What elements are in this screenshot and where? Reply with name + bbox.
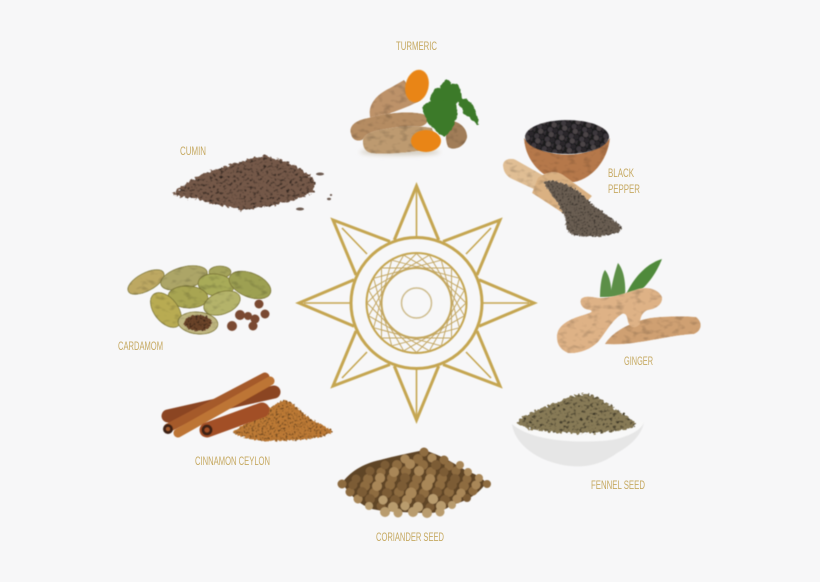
label: fennel seed: FENNEL SEED xyxy=(591,478,645,492)
icon: ground pepper xyxy=(543,181,622,237)
icon: white bowl xyxy=(512,420,644,466)
label: black pepper: BLACK xyxy=(608,166,634,180)
icon: peppercorns xyxy=(525,120,609,154)
icon: scoop xyxy=(503,159,592,219)
spice: turmeric xyxy=(350,39,479,155)
label: coriander seed: CORIANDER SEED xyxy=(376,530,444,544)
spice: cumin xyxy=(173,144,332,210)
label: turmeric: TURMERIC xyxy=(396,39,437,53)
label: ginger: GINGER xyxy=(624,354,653,368)
icon: opened pod seeds xyxy=(184,315,212,331)
icon: cinnamon powder xyxy=(232,400,333,441)
centre circle xyxy=(402,288,432,318)
spice: black pepper xyxy=(503,120,640,237)
icon: loose seeds xyxy=(227,300,270,331)
label: cumin: CUMIN xyxy=(180,144,206,158)
spice: cardamom xyxy=(118,261,275,353)
icon: wooden bowl xyxy=(524,138,610,183)
icon: turmeric roots xyxy=(350,67,467,155)
icon: cumin pile xyxy=(173,155,315,210)
icon: ginger root xyxy=(557,288,701,353)
label: black pepper: PEPPER xyxy=(608,182,640,196)
label: cardamom: CARDAMOM xyxy=(118,339,163,353)
spice: ginger xyxy=(557,259,701,368)
woven ring xyxy=(366,253,466,353)
outer ring xyxy=(351,238,482,368)
icon: ginger leaves xyxy=(600,259,662,297)
star spikes xyxy=(299,186,534,420)
icon: fennel seeds xyxy=(516,394,636,433)
icon: coriander pile xyxy=(338,448,490,518)
spice: fennel seed xyxy=(512,394,645,492)
icon: stray cumin seeds xyxy=(296,172,332,210)
spice: coriander seed xyxy=(338,448,490,544)
sun emblem xyxy=(299,186,534,420)
icon: cinnamon sticks xyxy=(164,377,274,434)
icon: cardamom pods xyxy=(124,261,275,336)
icon: turmeric leaves xyxy=(422,80,479,137)
label: black pepper xyxy=(608,166,640,196)
label: cinnamon ceylon: CINNAMON CEYLON xyxy=(195,454,270,468)
spice: cinnamon xyxy=(164,377,333,468)
